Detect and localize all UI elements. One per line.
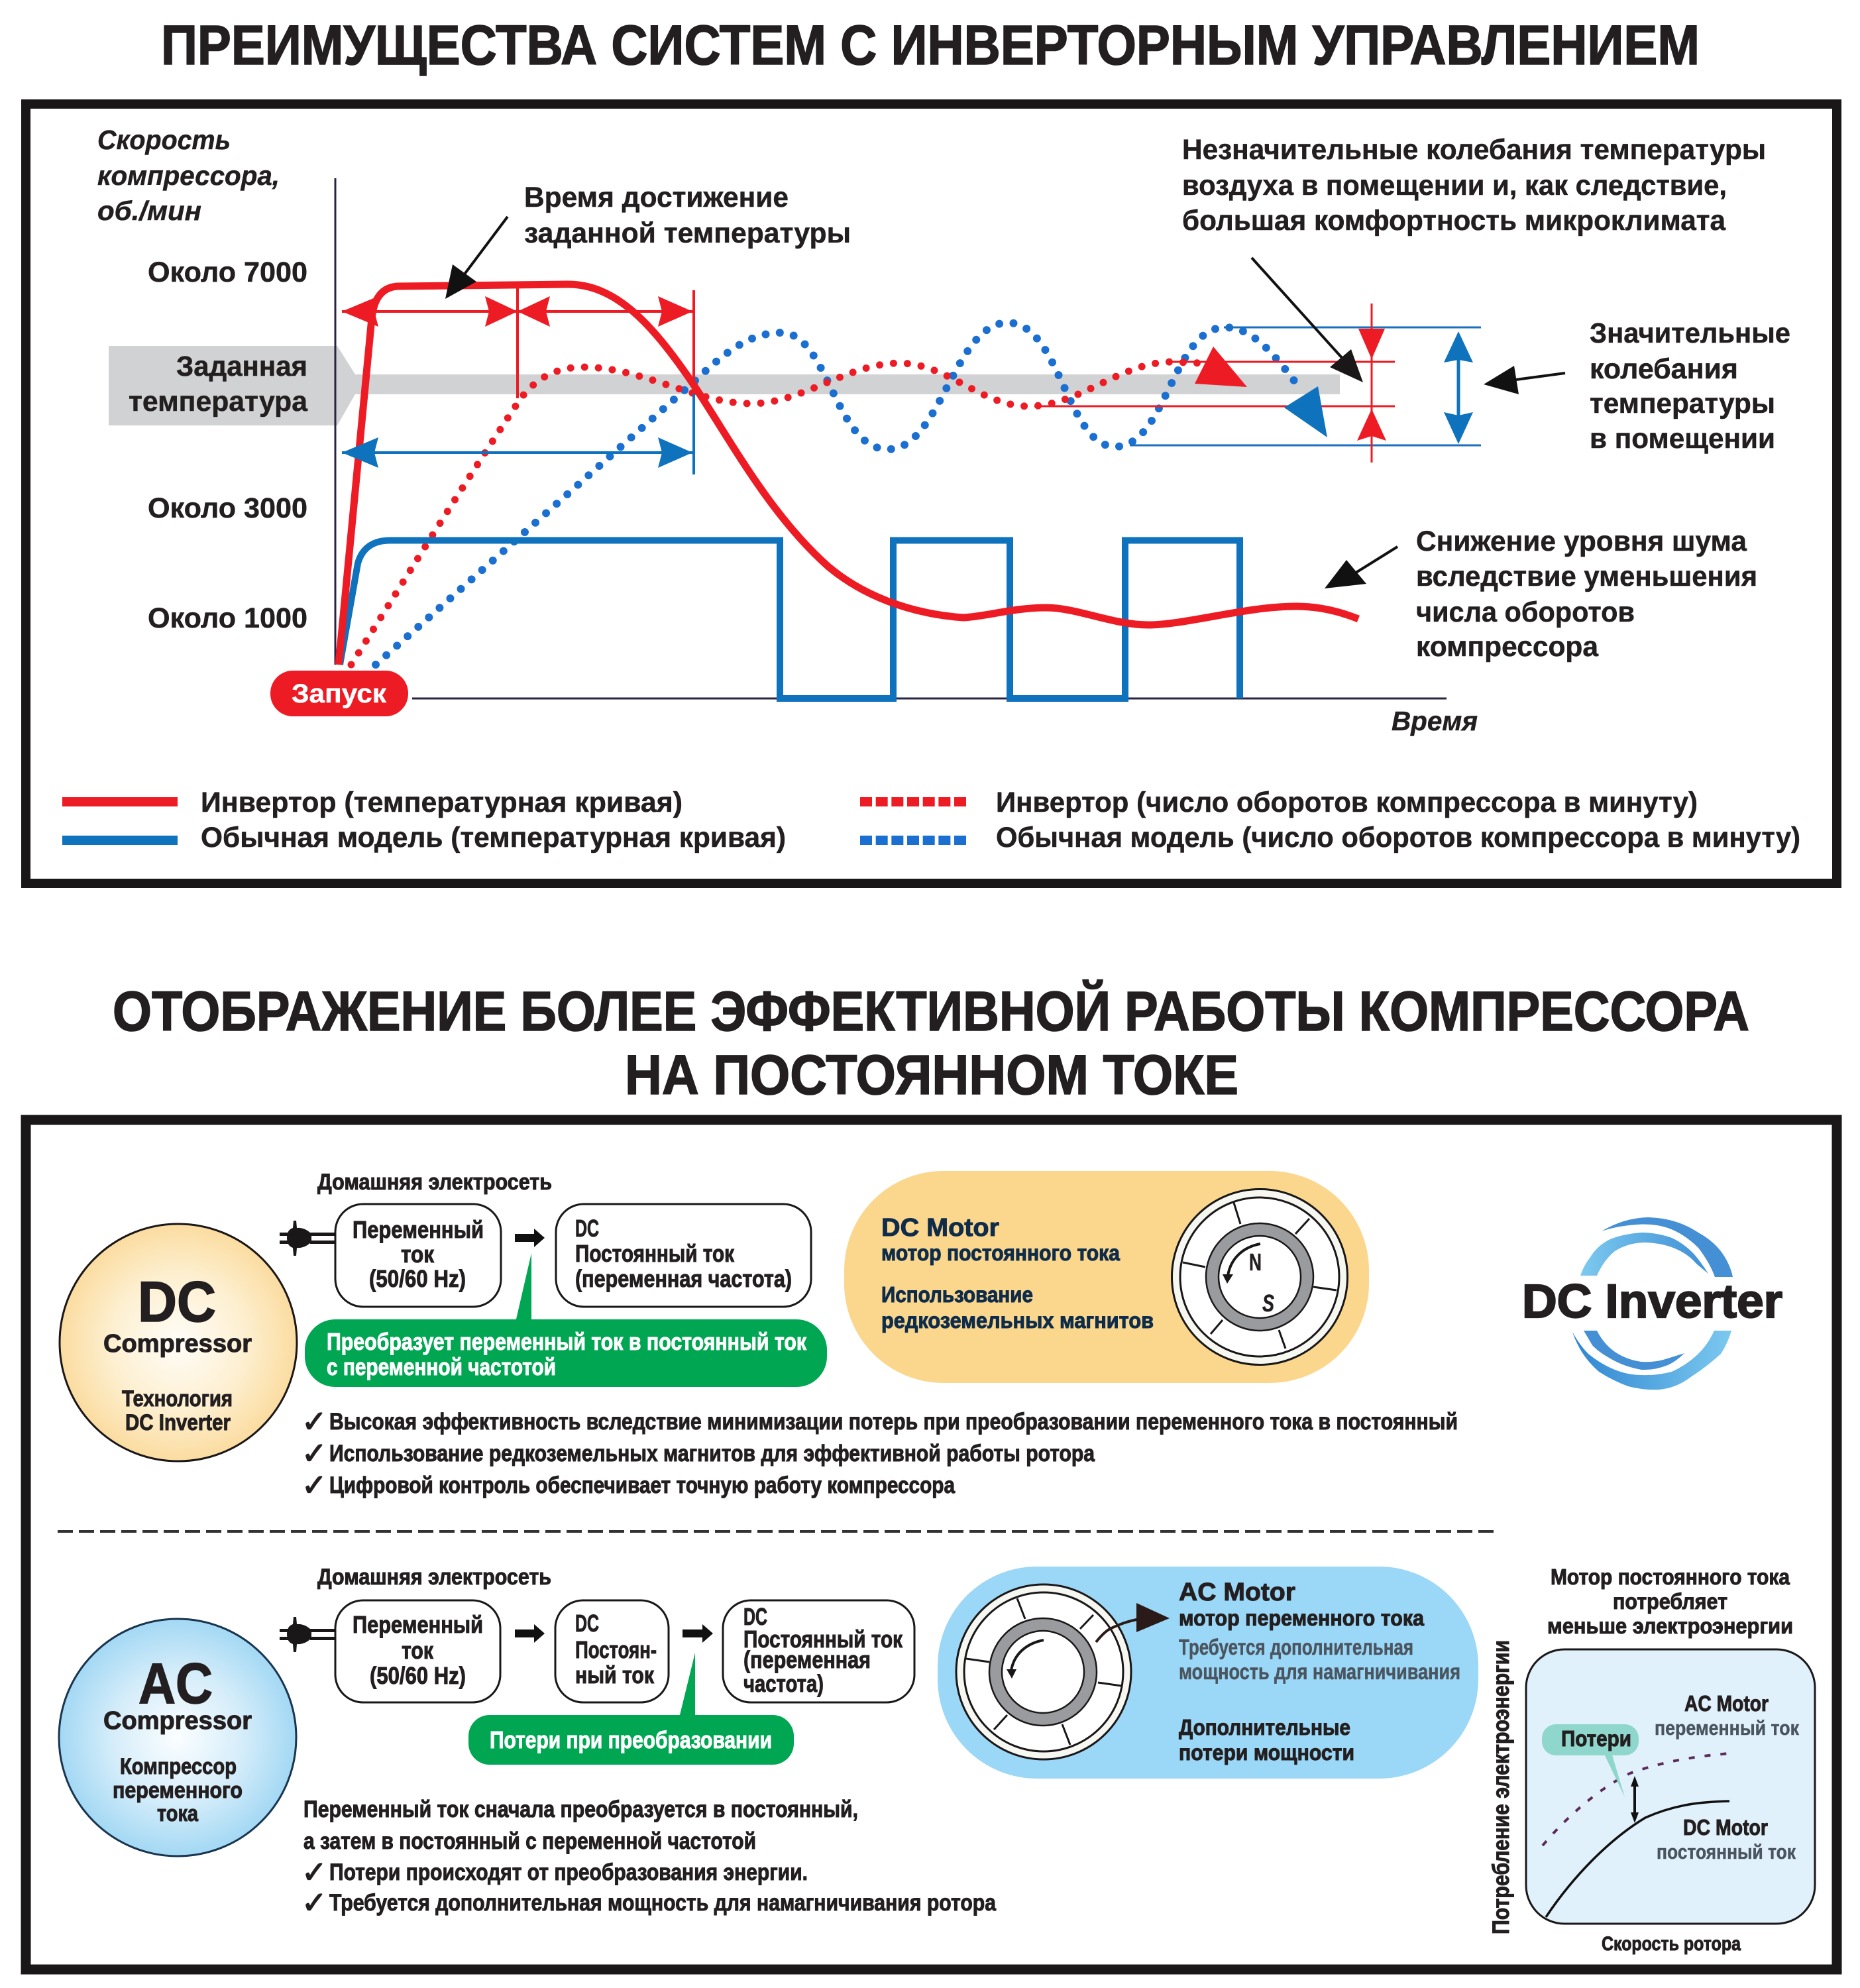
- panel: DC motor: Использование: [881, 1282, 1033, 1307]
- callout: large fluctuations: Значительные: [1590, 317, 1790, 349]
- y axis values: Около 1000: [148, 602, 307, 634]
- legend: [62, 787, 1800, 854]
- callout: large fluctuations: колебания: [1590, 353, 1738, 385]
- box: DC variable output: Постоянный ток: [743, 1626, 903, 1653]
- panel: inverter chart: [26, 104, 1837, 883]
- panel: DC motor: [844, 1171, 1369, 1383]
- arrow: [515, 1624, 545, 1643]
- circle: AC compressor: тока: [157, 1801, 199, 1826]
- chart: motor power: постоянный ток: [1657, 1840, 1796, 1863]
- box: DC intermediate: ный ток: [575, 1661, 655, 1688]
- circle: AC compressor: AC: [138, 1652, 213, 1716]
- panel: AC motor: потери мощности: [1179, 1740, 1354, 1765]
- box: AC input: [335, 1204, 501, 1307]
- callout: conversion: с переменной частотой: [327, 1353, 556, 1380]
- y axis values: Около 7000: [148, 256, 307, 288]
- callout: large fluctuations: [1484, 317, 1790, 455]
- x axis label: Время: [1392, 706, 1478, 736]
- callout: conversion: Преобразует переменный ток в постоянный ток: [327, 1328, 807, 1355]
- curve: conventional compressor speed dotted: [376, 323, 1302, 665]
- heading: DC motor consumes less: меньше электроэнергии: [1547, 1614, 1793, 1638]
- icon: plug DC: [280, 1221, 335, 1256]
- title: inverter advantages: ПРЕИМУЩЕСТВА СИСТЕМ С ИНВЕРТОРНЫМ УПРАВЛЕНИЕМ: [161, 14, 1700, 76]
- pill: start: [270, 671, 408, 716]
- callout: noise reduction: числа оборотов: [1416, 596, 1635, 628]
- list: AC drawbacks: Потери происходят от преобразования энергии.: [329, 1859, 808, 1885]
- box: DC intermediate: Постоян-: [575, 1636, 657, 1663]
- panel: AC motor: мощность для намагничивания: [1179, 1659, 1460, 1684]
- circle: AC compressor: переменного: [113, 1778, 243, 1803]
- logo: DC Inverter: [1522, 1217, 1782, 1390]
- icon: red fluctuation markers: [1195, 329, 1386, 441]
- y axis label: [97, 125, 280, 226]
- circle: AC compressor: [59, 1619, 296, 1856]
- list: AC drawbacks: [301, 1796, 996, 1920]
- circle: DC compressor: DC: [138, 1270, 216, 1334]
- callout: time to target: Время достижение: [524, 182, 789, 213]
- callout: noise reduction: компрессора: [1416, 631, 1599, 663]
- callout: conversion losses: Потери при преобразовании: [490, 1726, 772, 1753]
- list: AC drawbacks: а затем в постоянный с переменной частотой: [303, 1828, 756, 1854]
- icon: AC motor: [956, 1584, 1131, 1759]
- box: DC output: (переменная частота): [575, 1265, 792, 1292]
- title: efficient DC compressor: [113, 980, 1749, 1106]
- callout: conversion losses: [468, 1653, 794, 1765]
- curve: inverter temperature: [339, 284, 1358, 665]
- y axis label: об./мин: [97, 195, 201, 226]
- chart: motor power: [1526, 1649, 1815, 1924]
- circle: AC compressor: Компрессор: [120, 1754, 237, 1779]
- box: DC intermediate: DC: [575, 1610, 599, 1637]
- band: target temperature: температура: [129, 386, 308, 417]
- callout: noise reduction: вследствие уменьшения: [1416, 561, 1757, 592]
- legend: Обычная модель (число оборотов компрессора в минуту): [996, 822, 1800, 854]
- title: efficient DC compressor: НА ПОСТОЯННОМ ТОКЕ: [625, 1044, 1238, 1106]
- list: DC advantages: Высокая эффективность вследствие минимизации потерь при преобразовании переменного тока в постоянный: [329, 1409, 1458, 1435]
- box: AC input: (50/60 Hz): [370, 1662, 466, 1689]
- box: DC intermediate: [555, 1600, 669, 1702]
- list: DC advantages: [301, 1404, 1458, 1503]
- y axis label: Скорость: [97, 125, 231, 155]
- callout: conversion: [305, 1253, 827, 1387]
- list: DC advantages: Использование редкоземельных магнитов для эффективной работы ротора: [329, 1441, 1095, 1466]
- pill: start: Запуск: [292, 679, 387, 708]
- list: AC drawbacks: ✓: [301, 1885, 327, 1920]
- list: AC drawbacks: Переменный ток сначала преобразуется в постоянный,: [303, 1796, 858, 1822]
- callout: small fluctuations: Незначительные колебания температуры: [1182, 134, 1766, 166]
- heading: DC motor consumes less: Мотор постоянного тока: [1551, 1565, 1790, 1589]
- box: DC variable output: (переменная: [743, 1646, 871, 1673]
- box: AC input: ток: [402, 1637, 434, 1664]
- list: AC drawbacks: Требуется дополнительная мощность для намагничивания ротора: [329, 1890, 996, 1916]
- curve: DC motor: [1546, 1801, 1729, 1917]
- box: DC variable output: частота): [743, 1670, 824, 1697]
- callout: large fluctuations: в помещении: [1590, 423, 1775, 455]
- callout: small fluctuations: воздуха в помещении и, как следствие,: [1182, 170, 1727, 201]
- panel: AC motor: AC Motor: [1179, 1578, 1295, 1606]
- panel: AC motor: Требуется дополнительная: [1179, 1635, 1413, 1659]
- icon: plug AC: [280, 1617, 335, 1652]
- legend: Инвертор (число оборотов компрессора в минуту): [996, 787, 1698, 818]
- band: target temperature: [109, 346, 1340, 425]
- label: home grid AC: Домашняя электросеть: [317, 1565, 551, 1590]
- callout: noise reduction: [1325, 525, 1757, 663]
- circle: AC compressor: Compressor: [103, 1707, 252, 1735]
- circle: DC compressor: Compressor: [103, 1330, 252, 1358]
- legend: Инвертор (температурная кривая): [201, 787, 683, 818]
- curve: inverter compressor speed dotted: [351, 362, 1201, 665]
- y axis label: power consumption: Потребление электроэнергии: [1488, 1640, 1514, 1934]
- band: target temperature: Заданная: [176, 351, 307, 382]
- arrow: magnetising power: [1096, 1603, 1170, 1642]
- panel: compressor comparison: [26, 1120, 1837, 1969]
- list: DC advantages: ✓: [301, 1435, 327, 1471]
- band lines: small and large fluctuation: [1034, 304, 1481, 463]
- panel: AC motor: мотор переменного тока: [1179, 1606, 1425, 1630]
- callout: small fluctuations: [1182, 134, 1766, 382]
- arrows: time to target inverter: [342, 284, 694, 398]
- chart: motor power: AC Motor: [1684, 1691, 1769, 1716]
- arrow: [683, 1624, 713, 1643]
- heading: DC motor consumes less: [1547, 1565, 1793, 1638]
- callout: noise reduction: Снижение уровня шума: [1416, 525, 1747, 557]
- list: DC advantages: ✓: [301, 1467, 327, 1503]
- heading: DC motor consumes less: потребляет: [1613, 1589, 1727, 1614]
- arrow: loss gap: [1631, 1776, 1639, 1823]
- box: AC input: ток: [401, 1241, 435, 1268]
- callout: small fluctuations: большая комфортность микроклимата: [1182, 205, 1726, 237]
- y axis values: [148, 256, 307, 634]
- callout: losses: Потери: [1561, 1726, 1631, 1751]
- panel: DC motor: редкоземельных магнитов: [881, 1308, 1154, 1333]
- box: AC input: (50/60 Hz): [369, 1265, 466, 1292]
- box: DC variable output: DC: [743, 1603, 767, 1630]
- circle: DC compressor: Технология: [122, 1386, 233, 1411]
- label: home grid DC: Домашняя электросеть: [317, 1170, 552, 1195]
- icon: DC motor: N: [1249, 1248, 1262, 1276]
- arrow: [515, 1229, 545, 1247]
- legend: Обычная модель (температурная кривая): [201, 822, 786, 854]
- box: DC output: [556, 1204, 811, 1307]
- callout: losses: [1542, 1724, 1639, 1797]
- box: DC output: Постоянный ток: [575, 1240, 735, 1267]
- box: DC variable output: [723, 1600, 914, 1702]
- icon: DC motor: [1172, 1189, 1348, 1365]
- y axis values: Около 3000: [148, 492, 307, 524]
- list: DC advantages: ✓: [301, 1404, 327, 1439]
- box: DC output: DC: [575, 1215, 599, 1242]
- panel: DC motor: DC Motor: [881, 1214, 999, 1242]
- chart: motor power: DC Motor: [1683, 1815, 1768, 1840]
- panel: AC motor: [938, 1567, 1478, 1779]
- icon: blue fluctuation markers: [1284, 331, 1473, 444]
- list: DC advantages: Цифровой контроль обеспечивает точную работу компрессора: [329, 1472, 955, 1498]
- box: AC input: Переменный: [353, 1216, 484, 1243]
- panel: DC motor: мотор постоянного тока: [881, 1241, 1121, 1265]
- curve: conventional temperature: [340, 540, 1240, 698]
- panel: AC motor: Дополнительные: [1179, 1715, 1350, 1740]
- arrow: time to target conventional: [342, 394, 694, 474]
- x axis label: rotor speed: Скорость ротора: [1602, 1933, 1741, 1955]
- y axis label: компрессора,: [97, 160, 280, 191]
- axes: [335, 178, 1447, 698]
- circle: DC compressor: DC Inverter: [125, 1410, 231, 1435]
- curve: AC motor: [1543, 1753, 1729, 1846]
- chart: motor power: переменный ток: [1655, 1716, 1799, 1740]
- box: AC input: [335, 1600, 500, 1702]
- list: AC drawbacks: ✓: [301, 1854, 327, 1890]
- icon: DC motor: S: [1262, 1290, 1274, 1317]
- circle: DC compressor: [60, 1224, 297, 1461]
- callout: large fluctuations: температуры: [1590, 388, 1775, 419]
- callout: time to target: заданной температуры: [524, 217, 851, 249]
- callout: time to target: [445, 182, 851, 299]
- logo: DC Inverter: DC Inverter: [1522, 1276, 1782, 1328]
- box: AC input: Переменный: [353, 1611, 483, 1638]
